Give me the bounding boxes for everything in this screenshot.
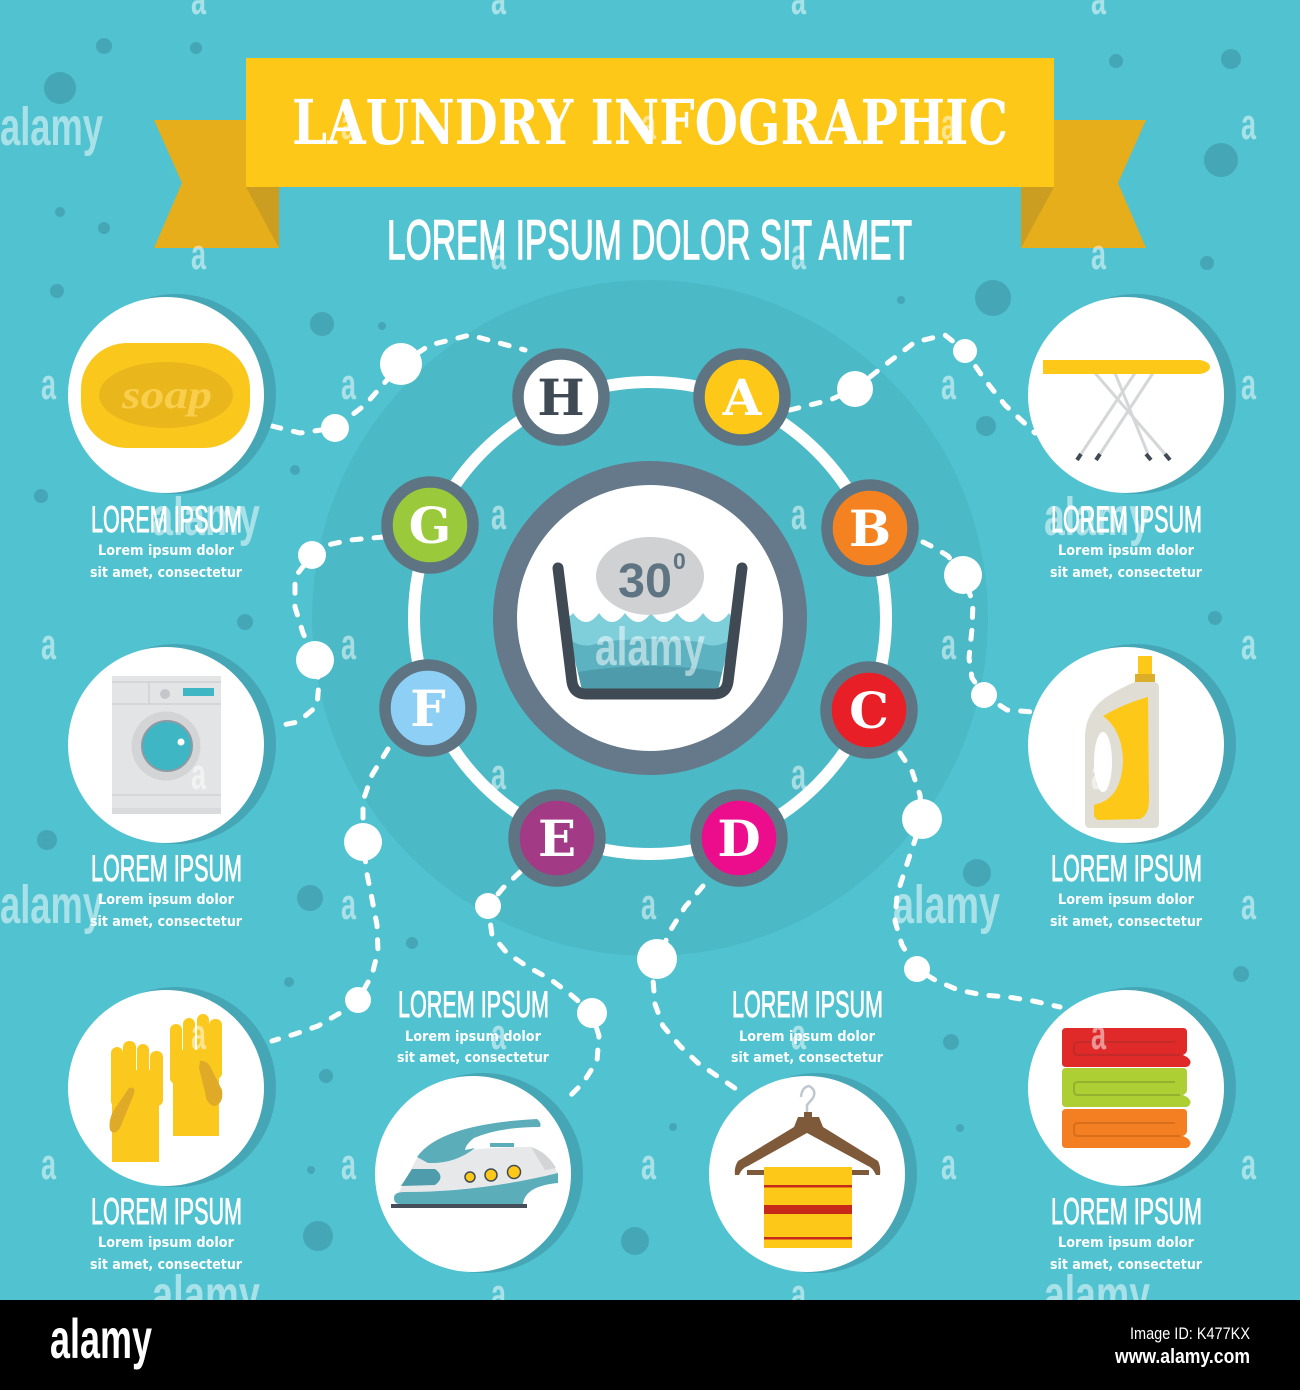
- caption: towels: sit amet, consectetur: [1050, 1257, 1202, 1273]
- icon: detergent bottle: [1085, 656, 1159, 828]
- watermarks: a: [1091, 1010, 1106, 1059]
- central wash basin: [505, 473, 795, 763]
- title: LAUNDRY INFOGRAPHIC: [292, 86, 1008, 159]
- outer ring: [414, 382, 886, 854]
- watermarks: a: [1241, 100, 1256, 149]
- caption: soap: [90, 499, 242, 581]
- caption: iron: Lorem ipsum dolor: [405, 1029, 541, 1045]
- letter badges A-H: F: [410, 679, 446, 738]
- watermarks: a: [1241, 1140, 1256, 1189]
- letter badges A-H: [385, 354, 913, 881]
- watermarks: a: [791, 750, 806, 799]
- watermarks: alamy: [1044, 487, 1150, 547]
- watermarks: a: [941, 360, 956, 409]
- icon: ironing board: [1043, 360, 1210, 460]
- watermarks: alamy: [152, 487, 260, 547]
- caption: hanger: LOREM IPSUM: [732, 984, 883, 1025]
- caption: gloves: [90, 1191, 242, 1273]
- watermarks: a: [191, 230, 206, 279]
- title ribbon: [154, 58, 1146, 248]
- letter badges A-H: C: [849, 681, 889, 740]
- watermarks: a: [191, 750, 206, 799]
- icon circle backdrops: [68, 294, 1236, 1273]
- watermarks: a: [791, 230, 806, 279]
- caption: ironing board: Lorem ipsum dolor: [1058, 543, 1194, 559]
- icon: towel on hanger: [735, 1086, 880, 1248]
- caption: towels: [1050, 1191, 1202, 1273]
- watermarks: a: [41, 1140, 56, 1189]
- watermarks: alamy: [893, 875, 1000, 935]
- caption: hanger: Lorem ipsum dolor: [739, 1029, 875, 1045]
- watermarks: a: [491, 1010, 506, 1059]
- footer bar: [0, 1300, 1300, 1390]
- caption: bottle: sit amet, consectetur: [1050, 914, 1202, 930]
- watermarks: a: [341, 360, 356, 409]
- watermarks: a: [941, 100, 956, 149]
- watermarks: a: [341, 880, 356, 929]
- caption: gloves: LOREM IPSUM: [91, 1191, 242, 1232]
- caption: bottle: [1050, 848, 1202, 930]
- watermarks: a: [1241, 880, 1256, 929]
- caption: washer: [90, 848, 242, 930]
- watermarks: a: [1091, 230, 1106, 279]
- caption: iron: [397, 984, 549, 1066]
- captions: [90, 499, 1202, 1273]
- letter badges A-H: G: [409, 496, 451, 555]
- watermarks: a: [641, 100, 656, 149]
- footer bar: alamy: [50, 1307, 152, 1370]
- caption: washer: sit amet, consectetur: [90, 914, 242, 930]
- footer bar: Image ID: K477KX: [1130, 1324, 1250, 1343]
- letter badges A-H: A: [722, 368, 763, 427]
- watermarks: a: [341, 620, 356, 669]
- caption: gloves: Lorem ipsum dolor: [98, 1235, 234, 1251]
- icon: soap: soap: [121, 372, 212, 417]
- icon: iron: [391, 1119, 558, 1208]
- caption: gloves: sit amet, consectetur: [90, 1257, 242, 1273]
- watermarks: a: [641, 1140, 656, 1189]
- watermarks: a: [341, 1140, 356, 1189]
- footer bar: www.alamy.com: [1114, 1346, 1250, 1368]
- watermarks: a: [491, 490, 506, 539]
- icon: washing machine: [112, 676, 221, 814]
- watermarks: alamy: [595, 617, 705, 677]
- watermarks: a: [1241, 360, 1256, 409]
- central wash basin: 30: [618, 555, 672, 608]
- watermarks: a: [941, 620, 956, 669]
- caption: bottle: Lorem ipsum dolor: [1058, 892, 1194, 908]
- watermarks: a: [41, 360, 56, 409]
- watermarks: alamy: [1044, 1265, 1150, 1325]
- caption: soap: Lorem ipsum dolor: [98, 543, 234, 559]
- caption: ironing board: [1050, 499, 1202, 581]
- caption: ironing board: sit amet, consectetur: [1050, 565, 1202, 581]
- subtitle: LOREM IPSUM DOLOR SIT AMET: [387, 208, 912, 271]
- icon: gloves: [110, 1014, 222, 1162]
- dashed connectors: [272, 335, 1060, 1101]
- watermarks: a: [491, 750, 506, 799]
- caption: soap: LOREM IPSUM: [91, 499, 242, 540]
- watermarks: a: [641, 880, 656, 929]
- watermarks: alamy: [0, 97, 103, 157]
- letter badges A-H: E: [538, 809, 576, 868]
- caption: iron: sit amet, consectetur: [397, 1050, 549, 1066]
- caption: washer: LOREM IPSUM: [91, 848, 242, 889]
- letter badges A-H: H: [537, 368, 585, 427]
- caption: soap: sit amet, consectetur: [90, 565, 242, 581]
- watermarks: a: [41, 620, 56, 669]
- caption: towels: Lorem ipsum dolor: [1058, 1235, 1194, 1251]
- icon: stacked towels: [1062, 1028, 1191, 1148]
- central wash basin: 0: [673, 548, 686, 574]
- watermarks: a: [941, 1140, 956, 1189]
- watermarks: a: [491, 230, 506, 279]
- letter badges A-H: D: [717, 809, 761, 868]
- watermarks: a: [1241, 620, 1256, 669]
- central halo circle: [312, 280, 988, 956]
- caption: washer: Lorem ipsum dolor: [98, 892, 234, 908]
- caption: hanger: sit amet, consectetur: [731, 1050, 883, 1066]
- caption: hanger: [731, 984, 883, 1066]
- watermarks: a: [1091, 750, 1106, 799]
- watermarks: a: [791, 1270, 806, 1319]
- letter badges A-H: B: [849, 499, 891, 558]
- caption: iron: LOREM IPSUM: [398, 984, 549, 1025]
- watermarks: a: [791, 1010, 806, 1059]
- watermarks: a: [191, 1010, 206, 1059]
- watermarks: a: [491, 1270, 506, 1319]
- watermarks: alamy: [152, 1265, 260, 1325]
- icon: soap: [81, 343, 250, 448]
- watermarks: a: [791, 490, 806, 539]
- watermarks: alamy: [0, 875, 103, 935]
- watermarks: a: [341, 100, 356, 149]
